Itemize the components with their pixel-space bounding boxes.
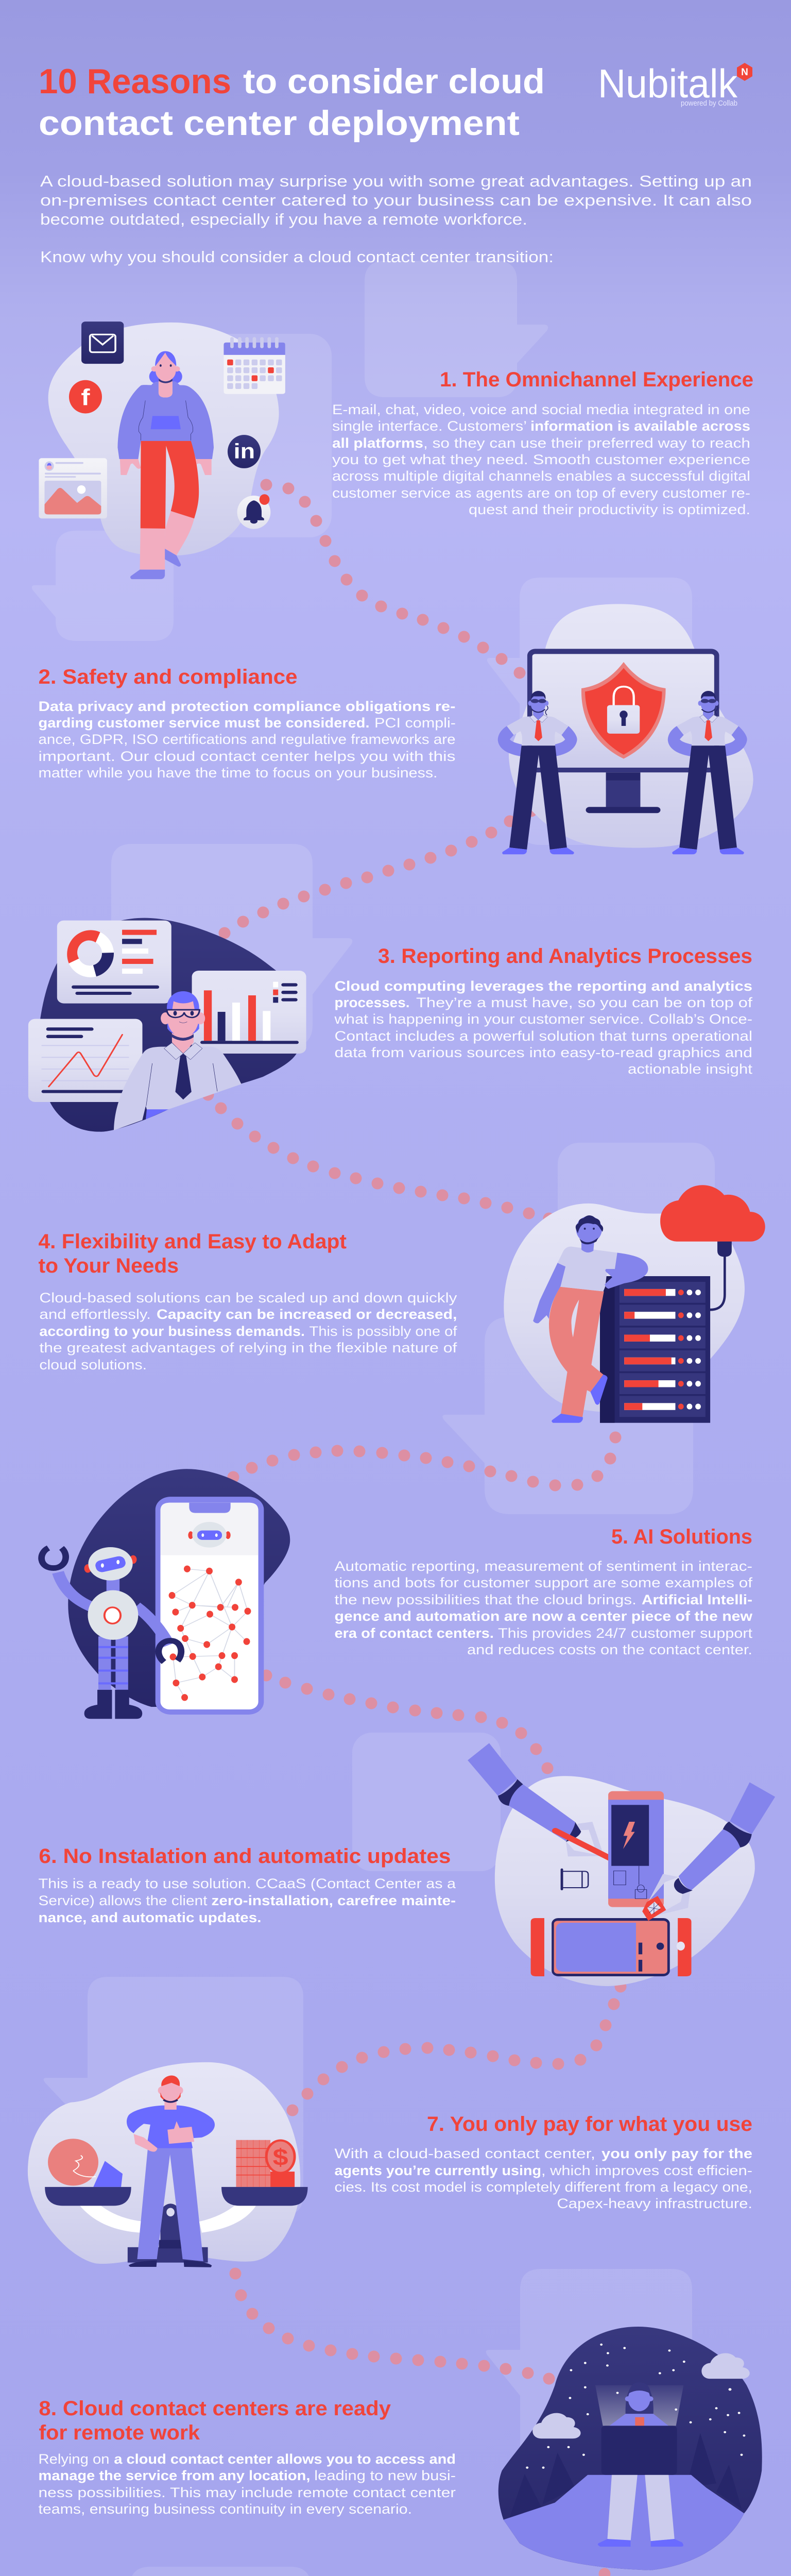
icon: coin stack: $: [273, 2144, 288, 2171]
icon: facebook: f: [81, 385, 91, 411]
title: [39, 62, 545, 143]
illustration 1: omnichannel woman with social icons: [39, 321, 285, 579]
illustration 4: man leaning on server rack with cloud: [504, 1185, 765, 1423]
section 5 body text: Artificial Intelli-: [642, 1592, 752, 1607]
section 8 body text: manage the service from any location,: [38, 2468, 310, 2483]
icon: facebook: [69, 380, 102, 414]
icon: light bulb: [48, 2139, 123, 2187]
intro text: A cloud-based solution may surprise you with some great advantages. Setting up an: [40, 172, 752, 190]
section 7 body text: cies. Its cost model is completely different from a legacy one,: [335, 2179, 752, 2195]
section 3 body text: data from various sources into easy-to-read graphics and: [335, 1045, 752, 1060]
dotted connector 3 to 4: [202, 1089, 555, 1224]
icon: sim tray: [561, 1869, 588, 1890]
section 2 body text: [38, 699, 456, 781]
section 3 body text: They’re a must have, so you can be on top of: [416, 995, 753, 1010]
guard right: [668, 691, 747, 854]
section 5 body text: gence and automation are now a center piece of the new: [335, 1608, 752, 1624]
section 5 body text: era of contact centers.: [335, 1625, 494, 1641]
section 6 heading: 6. No Instalation and automatic updates: [39, 1845, 451, 1868]
section 3 heading: 3. Reporting and Analytics Processes: [378, 945, 752, 968]
section 6 body text: nance, and automatic updates.: [38, 1910, 261, 1925]
cable and plug: [710, 1254, 725, 1310]
icon: shield with padlock: [581, 662, 666, 759]
section 8 body text: teams, ensuring business continuity in every scenario.: [38, 2501, 412, 2517]
dotted connector 2 to 3: [218, 805, 538, 939]
section 8 heading: [39, 2397, 391, 2444]
section 5 body text: and reduces costs on the contact center.: [467, 1642, 752, 1657]
panel: bar chart: [192, 971, 306, 1054]
section 1 body text: information is available across: [530, 418, 750, 434]
intro text: [40, 172, 752, 266]
icon: sim chip: [642, 1896, 666, 1921]
title: 10 Reasons: [39, 62, 231, 101]
section 3 body text: what is happening in your customer service. Collab’s Once-: [334, 1011, 752, 1027]
scale pans: [45, 2187, 308, 2206]
section 5 body text: This provides 24/7 customer support: [498, 1625, 753, 1641]
section 1 body text: all platforms: [332, 435, 423, 451]
section 6 body text: Service) allows the client: [38, 1893, 208, 1908]
section 2 heading: 2. Safety and compliance: [38, 666, 298, 688]
icon: server rack: [600, 1276, 710, 1423]
woman with laptop: [598, 2382, 683, 2547]
section 3 body text: actionable insight: [628, 1061, 753, 1077]
section 5 body text: tions and bots for customer support are some examples of: [335, 1575, 753, 1590]
section 5 heading: 5. AI Solutions: [611, 1526, 752, 1548]
section 1 body text: customer service as agents are on top of every customer re-: [332, 485, 750, 501]
section 2 body text: important. Our cloud contact center helps you with this: [38, 749, 455, 764]
section 8 body text: a cloud contact center allows you to access and: [114, 2451, 456, 2467]
title: to consider cloud: [243, 62, 545, 101]
monitor: [527, 649, 719, 813]
section 8 body text: ness possibilities. This may include remote contact center: [38, 2485, 456, 2500]
man giving thumbs up: [127, 2076, 215, 2267]
intro text: become outdated, especially if you have a remote workforce.: [40, 210, 527, 228]
section 2 body text: garding customer service must be considered.: [38, 715, 370, 731]
illustration 8: remote worker on a hill at night: [498, 2327, 762, 2570]
icon: smartphone with network graph: [156, 1497, 264, 1715]
section 5 body text: the new possibilities that the cloud brings.: [335, 1592, 637, 1607]
illustration 6: robotic arms repairing phones: [468, 1743, 775, 1986]
icon: opened phone: [608, 1791, 664, 1907]
logo: Nubitalk: N: [741, 67, 748, 78]
section 8 body text: [38, 2451, 456, 2517]
section 2 body text: Data privacy and protection compliance obligations re-: [38, 699, 455, 714]
illustration 3: analytics dashboards with man: [28, 918, 306, 1132]
dotted connector 4 to 5: [228, 1431, 621, 1491]
intro text: on-premises contact center catered to your business can be expensive. It can also: [40, 191, 752, 209]
section 3 body text: processes.: [335, 995, 410, 1010]
section 4 body text: and effortlessly.: [39, 1307, 151, 1322]
illustration 2: security guards and monitor: [498, 604, 753, 854]
robot figure: [42, 1547, 181, 1719]
section 7 body text: agents you’re currently using: [335, 2163, 541, 2178]
right robot arm: [648, 1782, 775, 1916]
section 4 body text: the greatest advantages of relying in the flexible nature of: [39, 1340, 457, 1355]
section 4 heading: 4. Flexibility and Easy to Adapt: [38, 1230, 347, 1253]
icon: email: [81, 321, 124, 364]
section 3 body text: Contact includes a powerful solution that turns operational: [335, 1028, 752, 1044]
section 1 heading: 1. The Omnichannel Experience: [440, 368, 753, 391]
hill: [504, 2475, 744, 2570]
section 7 body text: you only pay for the: [601, 2146, 752, 2161]
illustration 5: robot and phone with network: [42, 1469, 290, 1719]
section 2 body text: matter while you have the time to focus on your business.: [38, 765, 437, 781]
section 7 body text: Capex-heavy infrastructure.: [557, 2196, 752, 2211]
icon: calendar: [223, 337, 285, 394]
section 4 body text: cloud solutions.: [39, 1357, 147, 1372]
section 2 body text: ance, GDPR, ISO certifications and regulative frameworks are: [38, 732, 456, 747]
icon: lower phone with case: [531, 1918, 692, 1976]
section 4 heading: [38, 1230, 347, 1277]
section 4 body text: [39, 1290, 457, 1372]
section 2 body text: PCI compli-: [374, 715, 456, 731]
dotted connector 7 to 8: [230, 2268, 555, 2384]
section 4 body text: according to your business demands.: [39, 1324, 305, 1339]
icon: linkedin: in: [234, 439, 255, 463]
section 3 body text: [334, 978, 753, 1077]
man with glasses: [114, 991, 242, 1130]
scale base: [78, 2204, 257, 2263]
section 1 body text: , so they can use their preferred way to reach: [423, 435, 750, 451]
section 1 body text: across multiple digital channels enables a successful digital: [332, 468, 750, 484]
left robot arm: [468, 1743, 614, 1860]
section 6 body text: This is a ready to use solution. CCaaS (Contact Center as a: [38, 1876, 456, 1891]
standing man: [533, 1215, 648, 1423]
panel: line chart: [28, 1019, 143, 1102]
dotted connector 5 to 6: [261, 1669, 553, 1774]
trees: [509, 2433, 742, 2518]
section 7 body text: With a cloud-based contact center,: [335, 2146, 595, 2161]
section 4 heading: to Your Needs: [38, 1255, 179, 1277]
section 8 body text: leading to new busi-: [314, 2468, 456, 2483]
panel: donut chart: [57, 921, 171, 1004]
icon: red cloud: [660, 1185, 765, 1257]
icon: clouds: [532, 2353, 750, 2438]
section 1 body text: E-mail, chat, video, voice and social media integrated in one: [332, 402, 750, 417]
section 5 body text: [335, 1558, 753, 1657]
section 4 body text: Cloud-based solutions can be scaled up and down quickly: [39, 1290, 457, 1306]
section 1 body text: you to get what they need. Smooth customer experience: [332, 452, 750, 467]
intro text: Know why you should consider a cloud contact center transition:: [40, 248, 554, 266]
section 7 heading: 7. You only pay for what you use: [427, 2113, 752, 2136]
illustration 7: man balancing scale with bulb and coins: [28, 2062, 308, 2267]
dotted connector 6 to 7: [286, 1980, 626, 2116]
section 8 heading: 8. Cloud contact centers are ready: [39, 2397, 391, 2420]
section 6 body text: [38, 1876, 456, 1925]
section 1 body text: [332, 402, 750, 517]
guard left: [498, 691, 577, 854]
logo: Nubitalk: Nubitalk: [598, 61, 738, 106]
woman figure: [117, 351, 214, 579]
section 7 body text: , which improves cost efficien-: [541, 2163, 752, 2178]
section 4 body text: Capacity can be increased or decreased,: [157, 1307, 457, 1322]
title: contact center deployment: [39, 104, 520, 143]
section 5 body text: Automatic reporting, measurement of sentiment in interac-: [335, 1558, 752, 1574]
dotted connector 8 to 9: [219, 2568, 611, 2576]
section 1 body text: single interface. Customers’: [332, 418, 527, 434]
section 3 body text: Cloud computing leverages the reporting and analytics: [335, 978, 752, 994]
stars: [526, 2344, 745, 2469]
logo: Nubitalk: powered by Collab: [681, 99, 737, 108]
light beam: [595, 2385, 683, 2426]
section 1 body text: quest and their productivity is optimized.: [469, 502, 750, 517]
icon: notification bell: [237, 494, 270, 529]
section 7 body text: [335, 2146, 752, 2211]
icon: coin stack: [236, 2140, 295, 2187]
icon: linkedin: [228, 435, 261, 468]
section 4 body text: This is possibly one of: [309, 1324, 457, 1339]
icon: social post card: [39, 458, 107, 518]
dotted connector 1 to 2: [261, 479, 525, 679]
section 8 body text: Relying on: [38, 2451, 109, 2467]
section 8 heading: for remote work: [39, 2421, 200, 2444]
section 6 body text: zero-installation, carefree mainte-: [211, 1893, 456, 1908]
